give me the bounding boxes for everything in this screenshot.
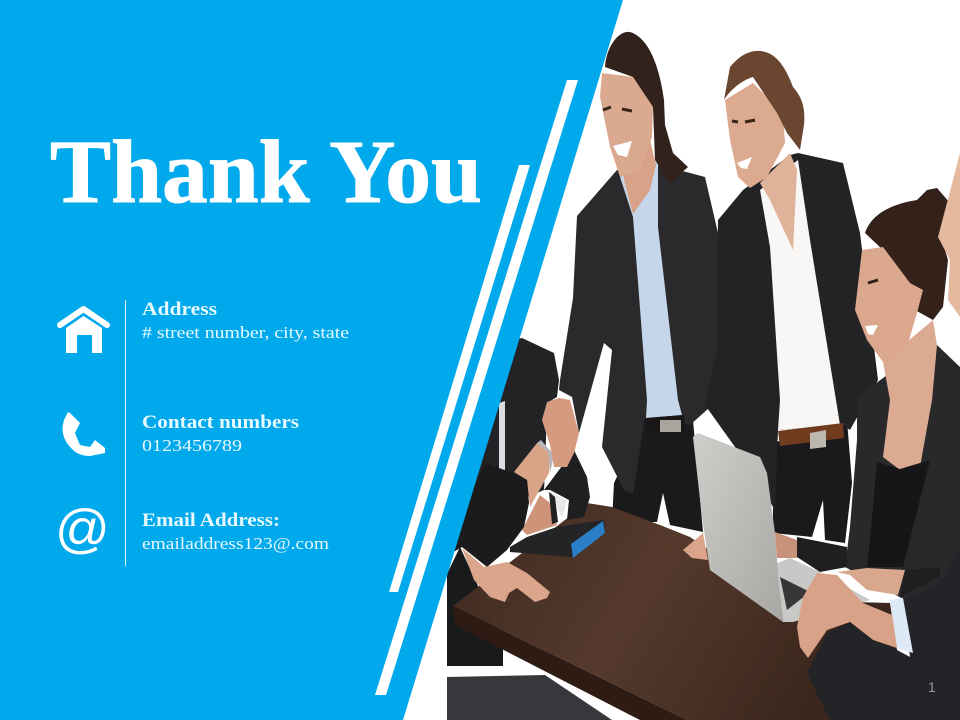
white diagonal stripe short [389, 165, 530, 592]
belt and buckle [778, 423, 844, 446]
hand on table [462, 548, 550, 602]
folder with blue band [510, 520, 605, 558]
seated man at left and chair [447, 338, 612, 720]
shirt [620, 160, 682, 418]
blue diagonal panel [0, 0, 623, 720]
hair and ponytail [724, 51, 804, 150]
contact: address: Address [142, 299, 217, 320]
left woman black sleeve [440, 463, 529, 567]
face [855, 247, 923, 362]
contact: address: # street number, city, state [142, 323, 349, 342]
contact: email [142, 510, 329, 553]
jacket [705, 153, 878, 510]
cuff [890, 598, 913, 653]
hair [605, 32, 688, 183]
black top [867, 460, 930, 567]
contact: phone numbers: 0123456789 [142, 436, 242, 455]
screen back [693, 433, 783, 622]
face [938, 153, 960, 317]
keyboard [780, 577, 810, 610]
clasped hands [797, 573, 897, 658]
icon: telephone [63, 412, 105, 456]
woman one, standing [559, 32, 718, 532]
contact: phone numbers: Contact numbers [142, 412, 299, 433]
suit [807, 547, 960, 720]
woman three, seated [797, 188, 960, 620]
laptop [693, 433, 870, 622]
icon: at sign: @ [55, 499, 110, 559]
contact: address [142, 299, 349, 342]
trousers [612, 418, 703, 532]
neck and chest [883, 320, 937, 470]
woman two, standing [705, 51, 878, 543]
neck [622, 140, 656, 214]
contact: email: Email Address: [142, 510, 280, 531]
table front edge [453, 606, 687, 720]
base [777, 558, 870, 622]
white diagonal stripe long [375, 80, 578, 695]
sleeve [797, 537, 847, 572]
icon: house [60, 309, 107, 353]
table [453, 503, 900, 720]
trousers [773, 420, 852, 543]
contact: email: emailaddress123@.com [142, 534, 329, 553]
vertical divider [125, 300, 126, 566]
left woman forearm and handshake [514, 443, 550, 507]
shirt [760, 160, 840, 430]
page number: 1 [928, 679, 936, 695]
belt and buckle [646, 415, 685, 434]
man at right edge [797, 153, 960, 720]
face [600, 73, 653, 177]
hair and bun [865, 188, 950, 320]
face [725, 83, 785, 188]
jacket [845, 345, 960, 620]
man's sleeve, hand and cuff [544, 450, 590, 520]
title: Thank You [50, 123, 482, 222]
photo: business team meeting [440, 32, 960, 720]
contact: phone numbers [142, 412, 299, 455]
hands and arms [440, 398, 940, 602]
neck [760, 153, 797, 250]
jacket [559, 165, 718, 494]
